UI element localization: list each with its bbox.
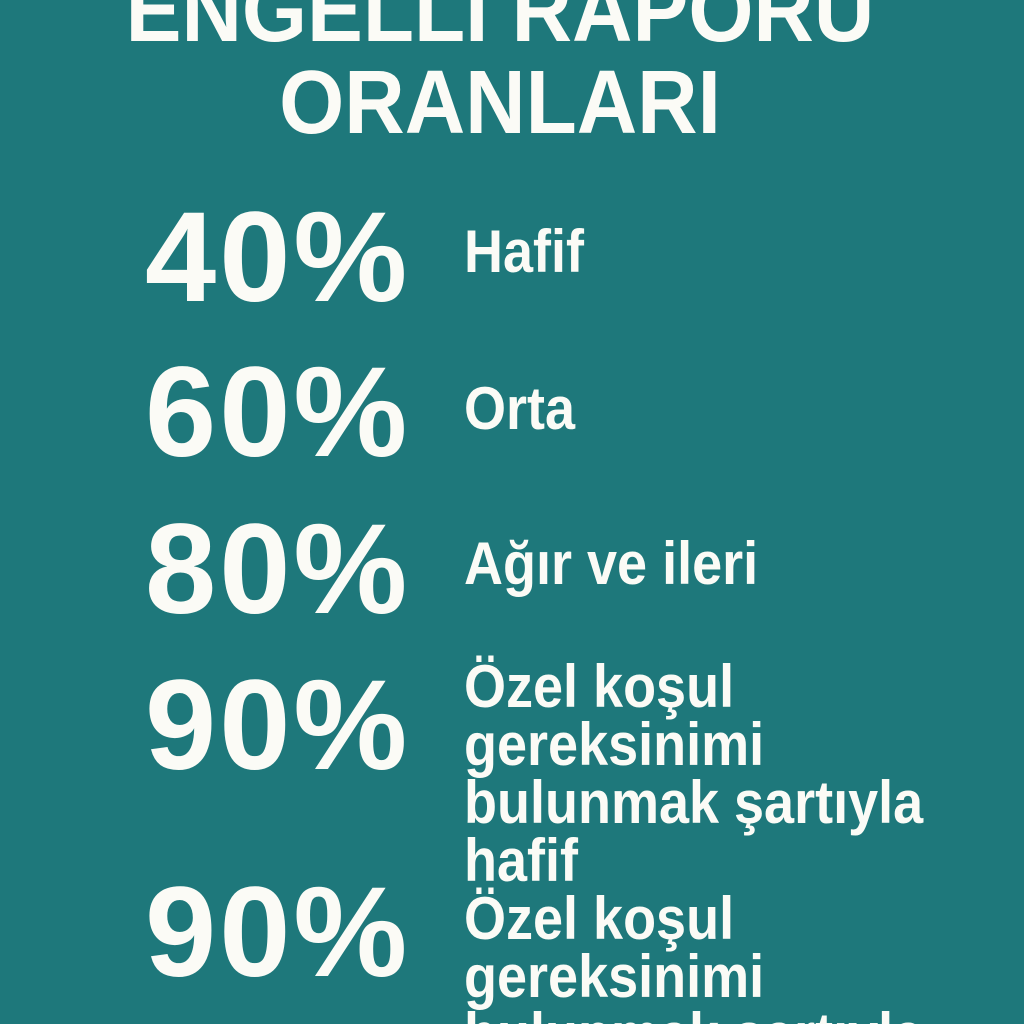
row: 80%: 80% — [145, 498, 410, 641]
row: 90% first: 90% — [145, 654, 410, 797]
row: 60%: 60% — [145, 341, 410, 484]
label: özel koşul second: Özel koşul — [464, 885, 734, 952]
label: Ağır ve ileri: Ağır ve ileri — [464, 530, 758, 597]
label: özel koşul second: gereksinimi — [464, 943, 764, 1010]
label: özel koşul hafif: bulunmak şartıyla — [464, 769, 923, 836]
row: 90% second: 90% — [145, 861, 410, 1004]
label: özel koşul hafif: hafif — [464, 827, 578, 894]
label: Orta: Orta — [464, 375, 575, 442]
label: özel koşul hafif — [464, 653, 924, 894]
label: özel koşul second — [464, 885, 923, 1024]
title — [126, 0, 874, 153]
title: ORANLARI — [279, 53, 721, 153]
label: özel koşul hafif: Özel koşul — [464, 653, 734, 720]
row: 40% Hafif: 40% — [145, 186, 410, 329]
label: Hafif: Hafif — [464, 218, 584, 285]
label: özel koşul hafif: gereksinimi — [464, 711, 764, 778]
